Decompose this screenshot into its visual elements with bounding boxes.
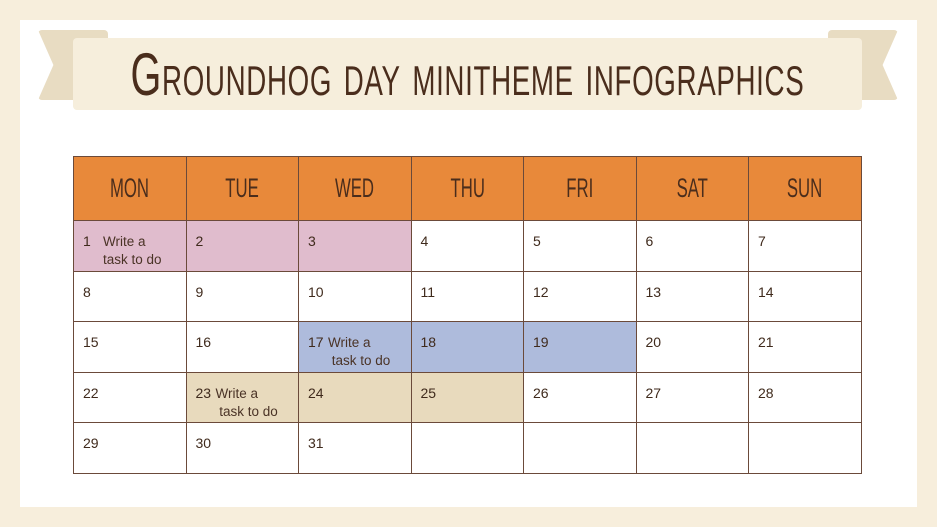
calendar table: MON — [110, 173, 149, 203]
calendar table: 9 — [196, 284, 203, 300]
calendar table: Write a — [328, 335, 371, 350]
calendar table: 30 — [196, 435, 211, 451]
calendar table: 1 — [83, 233, 91, 249]
calendar table: 2 — [196, 233, 203, 249]
title: Groundhog day minitheme infographics — [131, 40, 804, 108]
calendar table: 29 — [83, 435, 99, 451]
banner ribbon — [73, 38, 862, 110]
calendar table: SUN — [787, 173, 822, 203]
calendar table: 8 — [83, 284, 91, 300]
calendar table: 12 — [533, 284, 549, 300]
calendar table: 11 — [420, 284, 435, 300]
calendar table: 23 — [196, 384, 211, 400]
calendar table: 7 — [758, 233, 766, 249]
calendar table: task to do — [103, 252, 162, 267]
calendar table: 6 — [646, 233, 653, 249]
calendar table: 22 — [83, 384, 99, 400]
calendar table: 19 — [533, 334, 549, 350]
calendar table: FRI — [566, 173, 593, 203]
calendar table: TUE — [226, 173, 259, 203]
calendar table: 26 — [533, 384, 549, 400]
calendar table: THU — [450, 173, 484, 203]
calendar table: 13 — [646, 284, 661, 300]
calendar table: Write a — [103, 234, 146, 249]
calendar table: 28 — [758, 384, 774, 400]
calendar table: WED — [335, 173, 374, 203]
calendar table: 27 — [646, 384, 661, 400]
calendar table: task to do — [219, 404, 278, 418]
calendar table: 14 — [758, 284, 774, 300]
calendar table: 18 — [420, 334, 436, 350]
calendar table: 10 — [308, 284, 324, 300]
calendar table: 31 — [308, 435, 324, 451]
calendar table: 25 — [420, 384, 436, 400]
calendar table: 15 — [83, 334, 99, 350]
calendar table: 20 — [646, 334, 661, 350]
calendar table — [73, 156, 862, 474]
calendar table: 16 — [196, 334, 211, 350]
calendar table: SAT — [677, 173, 708, 203]
calendar table: 21 — [758, 334, 774, 350]
calendar table: 24 — [308, 384, 324, 400]
calendar table: 17 — [308, 334, 324, 350]
banner flag left — [38, 30, 108, 100]
calendar table: 3 — [308, 233, 316, 249]
calendar table: 5 — [533, 233, 541, 249]
calendar table: Write a — [216, 386, 258, 400]
calendar table: 4 — [420, 233, 428, 249]
calendar table: task to do — [332, 353, 390, 368]
banner flag right — [828, 30, 898, 100]
